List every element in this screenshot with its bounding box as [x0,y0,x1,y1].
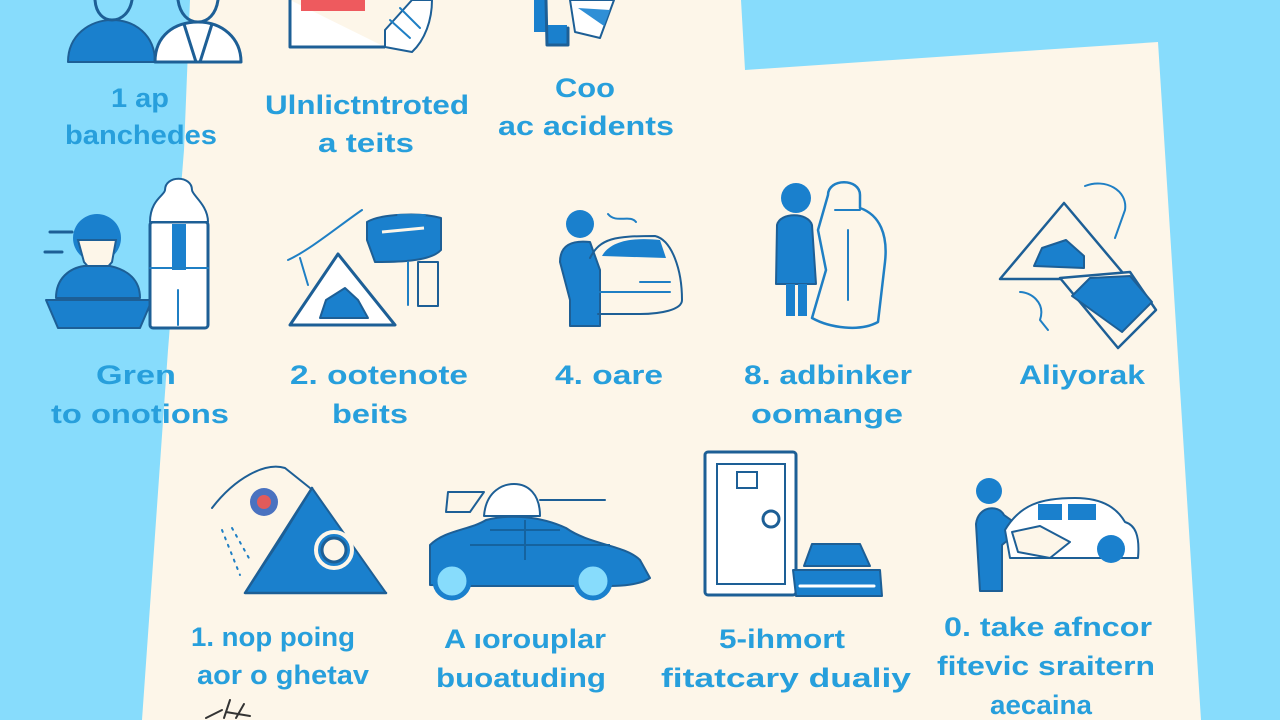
icon: door and small machine [705,452,882,596]
label: 1: 1 ap [111,83,169,113]
icon: warning triangles with cars [1000,183,1156,348]
label: green to emotions [51,360,229,429]
label: A: buoatuding [436,663,606,693]
label: 0: aecaina [990,690,1093,720]
label: 5 [661,624,911,693]
label: 2 [290,360,468,429]
icon: blue car with dome [430,484,650,598]
label: 0: 0. take afncor [944,612,1153,642]
label: 1: banchedes [65,120,217,150]
label: unrestricted [265,90,469,158]
icon: person by car [560,210,682,326]
label: always: Aliyorak [1019,360,1146,390]
label: 1 nop: aor o ghetav [197,660,369,690]
label: unrestricted: Ulnlictntroted [265,90,469,120]
label: 1 nop: 1. nop poing [191,622,355,652]
icon: two people [68,0,241,62]
label: unrestricted: a teits [318,128,414,158]
icon: person and robed figure [776,182,886,328]
label: 5: 5-ihmort [719,624,845,654]
icon: document with hand [290,0,432,52]
label: car accidents [498,73,674,141]
label: car accidents: Coo [555,73,615,103]
label: 2: 2. ootenote [290,360,468,390]
label: 8 [744,360,913,429]
label: green to emotions: Gren [96,360,176,390]
icon: warning triangle with car and camera [288,210,441,325]
label: car accidents: ac acidents [498,111,674,141]
label: 8: 8. adbinker [744,360,913,390]
label: A [436,624,607,693]
label: 2: beits [332,399,408,429]
label: 1 nop [191,622,369,690]
icon: mountain triangle with lens [212,467,386,593]
icon: partial burst at bottom [206,700,250,718]
label: green to emotions: to onotions [51,399,229,429]
label: 1 [65,83,217,150]
label: 4: 4. oare [555,360,663,390]
label: 0: fitevic sraitern [937,651,1155,681]
label: 5: fitatcary dualiy [661,663,911,693]
icon: man at laptop and doctor [45,179,208,328]
icon: person with paper [534,0,614,45]
label: 8: oomange [751,399,903,429]
icon: person at white car [976,478,1138,591]
label: 0 [937,612,1155,720]
label: A: A ıorouplar [444,624,607,654]
